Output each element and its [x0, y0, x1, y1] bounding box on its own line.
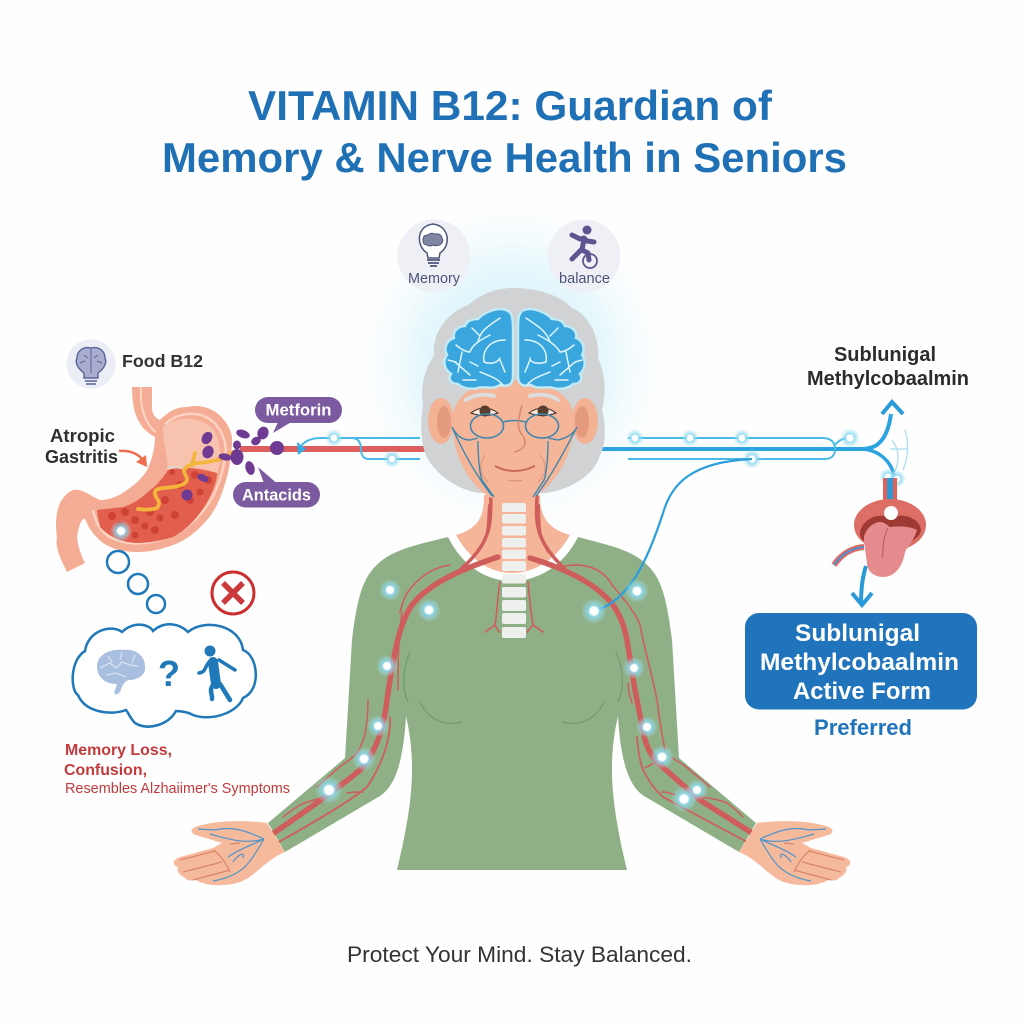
- face: [453, 380, 574, 501]
- symptoms text: Memory Loss,: [65, 742, 172, 759]
- mouth: [495, 466, 535, 471]
- callout: antacids: [233, 467, 320, 508]
- tagline: Protect Your Mind. Stay Balanced.: [347, 942, 692, 967]
- left lobe: [444, 309, 513, 389]
- active form box: Sublunigal: [795, 620, 920, 647]
- icon: balance: [548, 220, 620, 292]
- brain folds: [448, 318, 505, 385]
- callout: metformin: [255, 397, 342, 433]
- face veins: [452, 427, 577, 497]
- active form box: Methylcobaalmin: [760, 649, 959, 676]
- right lobe: [518, 309, 585, 389]
- thought cloud: [73, 624, 256, 727]
- callout: metformin: Metforin: [266, 402, 332, 420]
- label: atropic gastritis: Atropic: [50, 426, 115, 446]
- brain icon: [97, 650, 145, 694]
- icon: balance: balance: [559, 271, 610, 287]
- left nerve and artery line: [240, 429, 434, 468]
- eyebrows: [466, 395, 558, 400]
- symptoms text: Resembles Alzhaiimer's Symptoms: [65, 781, 290, 797]
- label: preferred: Preferred: [814, 715, 912, 740]
- arteries: neck and right arm: [530, 497, 755, 842]
- glasses: [470, 414, 558, 438]
- label: sublingual methylcobalamin: [807, 344, 969, 390]
- active form box: [745, 613, 977, 710]
- left hand: [174, 821, 285, 885]
- symptoms text: [64, 742, 290, 797]
- brain: [444, 309, 585, 389]
- spine: [502, 503, 526, 638]
- torso and sleeves: [268, 537, 756, 870]
- title: [162, 82, 847, 181]
- ears: [428, 398, 454, 444]
- callout: antacids: Antacids: [242, 486, 311, 504]
- neck: [456, 495, 570, 574]
- icon: memory: [398, 220, 470, 292]
- label: sublingual methylcobalamin: Sublunigal: [834, 344, 936, 366]
- icon: food b12: [66, 340, 116, 388]
- eyes: [471, 408, 556, 416]
- brain glow: [357, 200, 667, 530]
- label: sublingual methylcobalamin: Methylcobaalmin: [807, 368, 969, 390]
- label: atropic gastritis: Gastritis: [45, 447, 118, 467]
- arrow: down to active form: [852, 566, 872, 605]
- label: food b12: Food B12: [122, 351, 203, 371]
- confused person: [199, 646, 235, 700]
- purple drug particles: [182, 425, 284, 500]
- title: Memory & Nerve Health in Seniors: [162, 134, 847, 181]
- nerve signal from shoulder: [595, 459, 752, 611]
- arrow: gastritis: [119, 451, 147, 467]
- hair: [421, 288, 605, 493]
- b12 strand: [138, 452, 233, 510]
- nerve glow points: [315, 579, 708, 812]
- mouth and tongue: [834, 478, 926, 577]
- head: [421, 288, 605, 501]
- question mark: ?: [158, 653, 180, 694]
- thought bubbles: [107, 551, 165, 613]
- stomach: [56, 387, 233, 572]
- label: atropic gastritis: [45, 426, 118, 467]
- inner stomach lining: [97, 468, 217, 543]
- chest lines: [404, 652, 622, 723]
- collar: [448, 535, 578, 581]
- right nerve lines: [587, 402, 908, 488]
- arteries: neck and left arm: [271, 497, 543, 843]
- icon: red cross: [212, 572, 254, 614]
- right hand: [739, 821, 850, 885]
- active form box: Active Form: [793, 678, 931, 705]
- symptoms text: Confusion,: [64, 762, 147, 779]
- nose and wrinkles: [514, 405, 525, 452]
- icon: memory: Memory: [408, 271, 461, 287]
- title: VITAMIN B12: Guardian of: [248, 82, 773, 129]
